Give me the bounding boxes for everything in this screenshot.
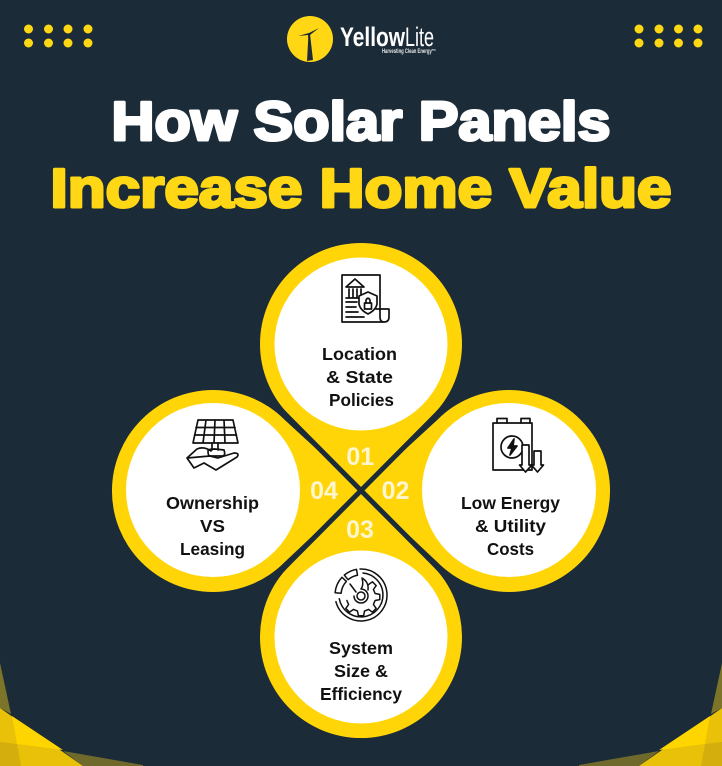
step numbers: 04 — [310, 477, 338, 505]
step numbers: 01 — [346, 443, 374, 471]
label: ownership vs leasing: Ownership — [166, 493, 259, 513]
decoration: top-right dots — [634, 24, 702, 48]
label: ownership vs leasing — [166, 493, 259, 559]
label: low energy and utility costs: Low Energy — [461, 493, 560, 513]
label: system size and efficiency: System — [329, 638, 393, 658]
label: location and state policies: Location — [322, 344, 397, 364]
decoration: top-left dots — [24, 24, 92, 48]
logo: YellowLite: Yellow — [340, 22, 406, 52]
label: low energy and utility costs: Costs — [487, 539, 534, 559]
title: How Solar Panels — [112, 90, 610, 152]
label: location and state policies: Policies — [329, 390, 394, 410]
label: location and state policies — [322, 344, 397, 410]
decoration: bottom-left corner — [0, 663, 143, 766]
diagram: four teardrop petals — [112, 243, 610, 738]
logo: YellowLite: Lite — [405, 22, 434, 52]
decoration: bottom-right corner — [579, 663, 722, 766]
title: Increase Home Value — [50, 157, 672, 219]
icon: hand holding solar panel — [187, 420, 238, 470]
step numbers: 03 — [346, 516, 374, 544]
icon: battery with falling cost arrows — [493, 418, 544, 472]
label: system size and efficiency: Efficiency — [320, 684, 402, 704]
label: ownership vs leasing: Leasing — [180, 539, 245, 559]
title — [50, 90, 672, 219]
label: location and state policies: & State — [326, 367, 393, 387]
label: low energy and utility costs: & Utility — [475, 516, 546, 536]
label: ownership vs leasing: VS — [200, 516, 225, 536]
label: low energy and utility costs — [461, 493, 560, 559]
icon: policy document with bank and lock — [342, 275, 389, 322]
logo: YellowLite: Harvesting Clean Energy™ — [382, 48, 436, 55]
step numbers: 02 — [382, 477, 409, 505]
label: system size and efficiency — [320, 638, 402, 704]
label: system size and efficiency: Size & — [334, 661, 388, 681]
icon: gauge and gear for system efficiency — [335, 569, 387, 621]
logo: YellowLite — [287, 16, 436, 62]
step numbers — [310, 443, 409, 544]
